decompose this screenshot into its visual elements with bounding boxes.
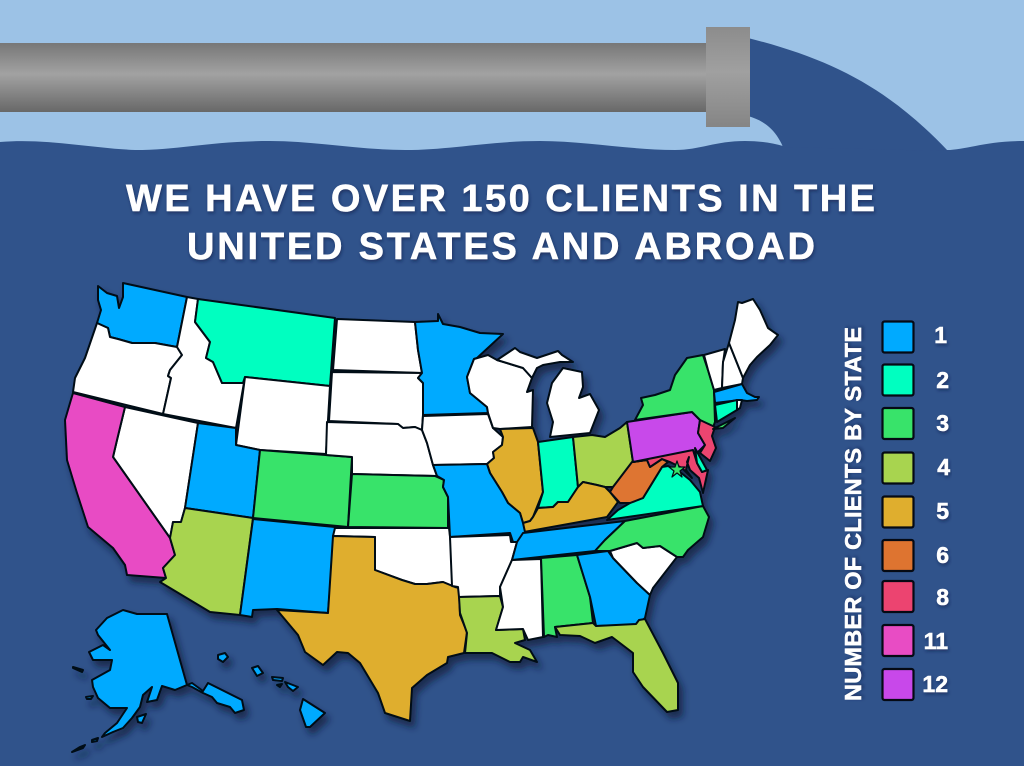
state: Florida (555, 619, 678, 712)
state: Wisconsin (467, 355, 533, 429)
title: UNITED STATES AND ABROAD (187, 226, 815, 268)
state: Washington (97, 283, 187, 347)
state: Montana (195, 299, 335, 386)
state: Maryland (633, 450, 708, 493)
legend numbers: 8 (936, 584, 949, 610)
state: Georgia (577, 551, 650, 626)
legend title: NUMBER OF CLIENTS BY STATE (840, 327, 866, 701)
state: Wyoming (236, 377, 330, 454)
legend numbers: 6 (936, 542, 949, 568)
state: Vermont (704, 349, 725, 390)
pipe flange (706, 27, 750, 127)
Hawaii: Oahu (252, 666, 263, 676)
legend swatches (882, 322, 914, 700)
Alaska panhandle (187, 683, 244, 713)
legend numbers: 1 (934, 322, 947, 348)
legend numbers: 5 (936, 498, 949, 524)
legend numbers: 3 (936, 410, 949, 436)
state: Iowa (422, 414, 503, 465)
background sky (0, 0, 1024, 160)
state: California (65, 393, 175, 578)
Nunivak island (86, 696, 93, 699)
state: Oklahoma (333, 528, 455, 587)
pipe (0, 27, 750, 127)
state: Colorado (253, 450, 352, 527)
state: Indiana (538, 437, 578, 508)
state: South Carolina (610, 543, 677, 595)
state: Utah (185, 423, 260, 518)
state: Idaho (163, 297, 245, 428)
legend numbers: 12 (922, 671, 948, 697)
state: Mississippi (496, 559, 543, 640)
state: Ohio (573, 422, 633, 487)
state: Michigan upper (497, 348, 573, 378)
state: Delaware (695, 448, 707, 472)
state: Rhode Island (737, 400, 742, 410)
state: Illinois (487, 428, 543, 523)
state: Michigan lower (547, 368, 599, 437)
legend numbers: 2 (936, 367, 949, 393)
Hawaii: Maui (285, 682, 298, 691)
state: Kentucky (523, 482, 618, 532)
Kodiak island (137, 714, 146, 723)
title: WE HAVE OVER 150 CLIENTS IN THE (126, 178, 875, 220)
state: Oregon (73, 323, 182, 414)
state: West Virginia (610, 459, 668, 503)
Aleutian island (72, 745, 85, 752)
water stream from pipe (748, 38, 948, 151)
map of the United States (65, 283, 778, 752)
state: Alabama (541, 555, 593, 637)
St Lawrence island (73, 667, 83, 672)
legend numbers (922, 322, 950, 697)
legend numbers: 4 (937, 454, 950, 480)
state: Kansas (348, 474, 448, 528)
pipe body (0, 43, 706, 112)
state: North Dakota (333, 319, 422, 373)
state: Pennsylvania (627, 412, 705, 462)
state: Arizona (160, 508, 253, 615)
state: Missouri (433, 464, 525, 542)
legend (840, 322, 950, 701)
Hawaii: Kauai (218, 653, 228, 662)
state: South Dakota (329, 372, 423, 430)
state: Connecticut (715, 400, 737, 422)
state: Arkansas (450, 535, 517, 597)
state: North Carolina (595, 506, 709, 557)
state: Tennessee (512, 521, 625, 560)
state: Massachusetts (714, 384, 759, 403)
state: Minnesota (415, 314, 503, 415)
state: Nevada (113, 407, 198, 538)
state: New York (635, 355, 715, 430)
state: New Hampshire (722, 343, 743, 388)
state: New Jersey (698, 420, 716, 461)
state: Texas (277, 536, 467, 721)
state: Alaska (89, 610, 187, 737)
state: Louisiana (459, 596, 537, 662)
state: Long Island (713, 418, 735, 429)
title (126, 178, 875, 268)
state: Virginia (607, 466, 703, 520)
small Aleutian island (92, 738, 98, 742)
state: New Mexico (240, 519, 335, 617)
Hawaii: Molokai (272, 677, 283, 681)
state: Nebraska (326, 422, 437, 476)
Hawaii: Big Island (300, 699, 325, 727)
icon: DC star (669, 461, 685, 477)
Hawaii: Lanai (277, 684, 282, 687)
legend numbers: 11 (924, 628, 948, 654)
state: Maine (729, 299, 778, 378)
